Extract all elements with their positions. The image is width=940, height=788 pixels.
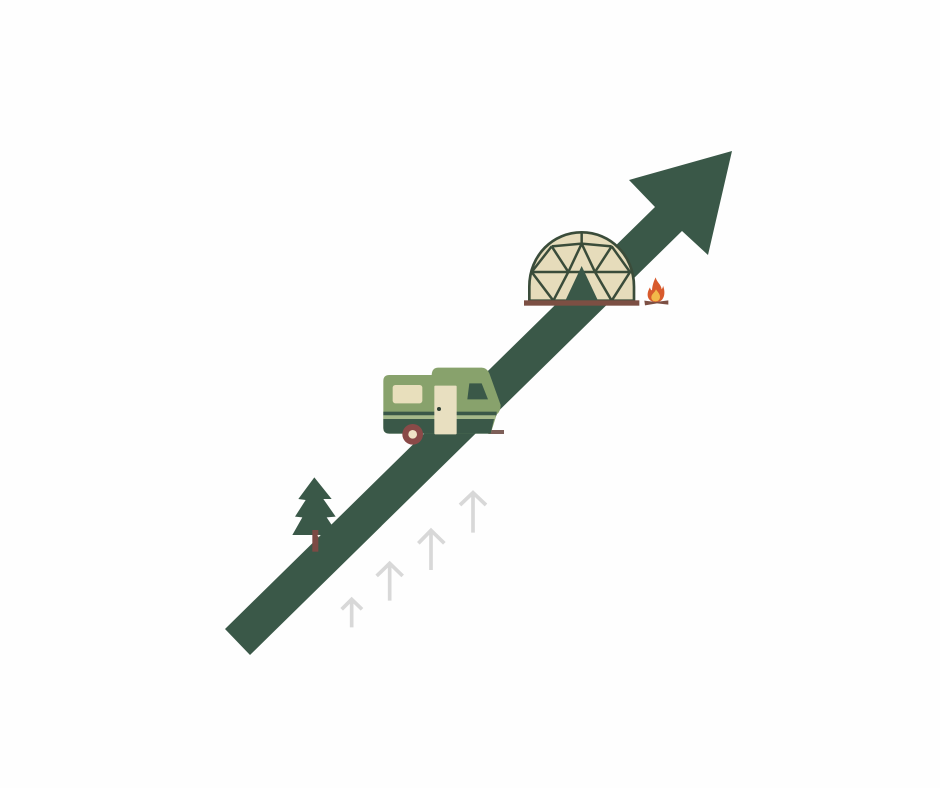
rising arrow 2 xyxy=(377,563,403,601)
caravan side window xyxy=(393,385,422,403)
growth arrow xyxy=(225,151,732,655)
icon: campfire xyxy=(644,277,668,305)
caravan hitch xyxy=(488,430,504,434)
caravan door xyxy=(434,386,457,434)
icon: pine tree xyxy=(292,477,338,552)
dome frame xyxy=(531,233,633,301)
dome shell xyxy=(529,232,634,301)
rising arrow 4 xyxy=(460,493,486,533)
dome base xyxy=(524,300,639,306)
rising arrow 1 xyxy=(342,599,362,627)
icon: geodesic dome tent xyxy=(524,232,639,306)
rising arrow 3 xyxy=(418,530,444,570)
icon: caravan xyxy=(383,368,504,445)
caravan front window xyxy=(467,383,488,399)
icon: small rising arrows xyxy=(342,493,486,627)
tent entrance xyxy=(565,266,598,301)
caravan wheel xyxy=(402,424,423,445)
caravan lower panel xyxy=(383,419,494,434)
caravan body xyxy=(383,368,501,434)
